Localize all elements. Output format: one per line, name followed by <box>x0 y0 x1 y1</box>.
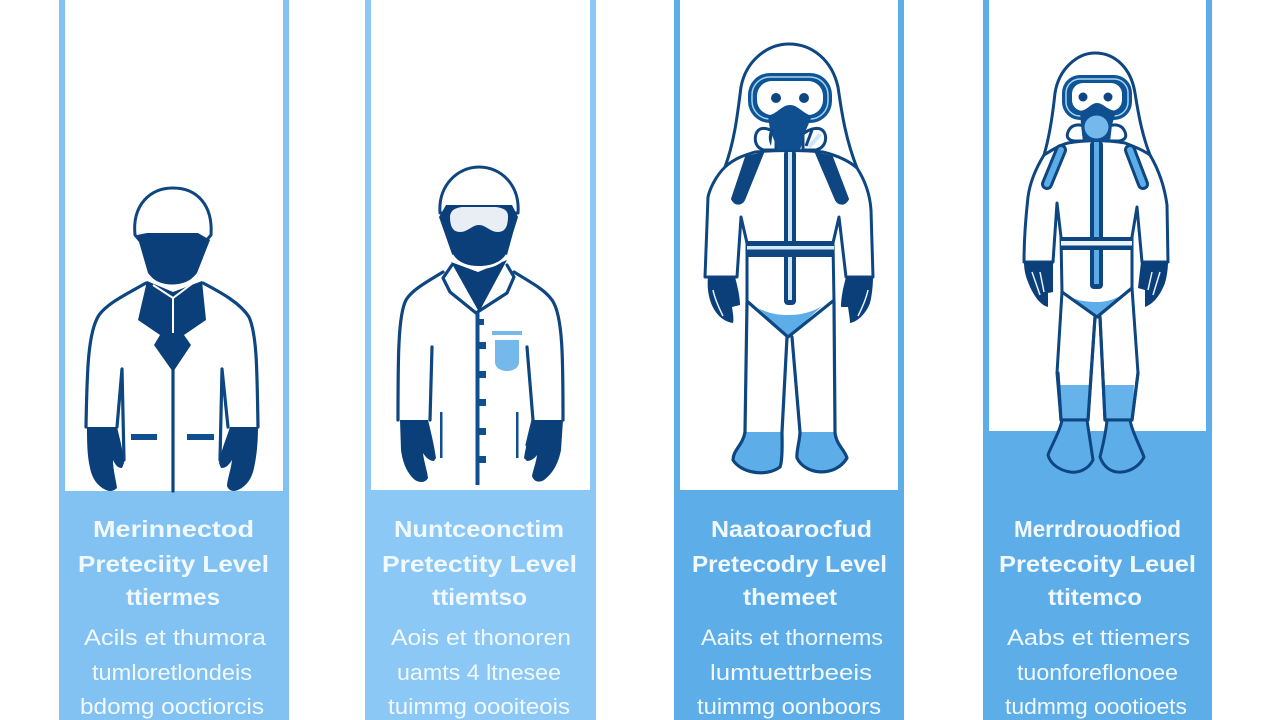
icon: goggles <box>1062 75 1132 120</box>
icon: boots <box>733 432 847 473</box>
text: level 4 caption: tudmmg oootioets <box>1005 694 1187 719</box>
text: level 1 caption: Acils et thumora <box>84 625 267 650</box>
text: level 3 caption: themeet <box>743 584 837 610</box>
text: level 1 caption: tumloretlondeis <box>92 660 252 685</box>
text: level 1 caption: ttiermes <box>126 584 220 610</box>
icon: full suit with dark respirator <box>705 44 873 473</box>
text: level 3 caption: tuimmg oonboors <box>697 694 881 719</box>
text: level 4 caption: Aabs et ttiemers <box>1007 625 1190 650</box>
icon: chest pocket <box>492 331 522 371</box>
panel: level 1 <box>59 0 289 720</box>
text: level 2 caption: ttiemtso <box>432 584 527 610</box>
text: level 3 caption <box>692 516 887 719</box>
text: level 1 caption <box>78 516 269 719</box>
text: level 2 caption: Pretectity Level <box>382 551 577 577</box>
icon: belt <box>1061 237 1132 250</box>
text: level 3 caption: Aaits et thornems <box>701 625 883 650</box>
icon: zipper <box>784 150 796 305</box>
text: level 3 caption: Naatoarocfud <box>711 516 872 542</box>
panel: level 4 <box>983 0 1212 720</box>
text: level 4 caption <box>999 516 1196 719</box>
text: level 2 caption: uamts 4 ltnesee <box>397 660 561 685</box>
text: level 4 caption: Pretecoity Leuel <box>999 551 1196 577</box>
text: level 2 caption <box>382 516 577 719</box>
icon: shoulder straps <box>732 153 848 204</box>
icon: respirator <box>755 105 826 150</box>
text: level 4 caption: ttitemco <box>1048 584 1142 610</box>
icon: coat with goggles and mask <box>398 167 563 485</box>
panel: level 3 <box>674 0 904 720</box>
text: level 2 caption: Aois et thonoren <box>391 625 571 650</box>
icon: blue respirator <box>1067 103 1126 142</box>
icon: goggles <box>748 73 832 123</box>
icon: zipper <box>1090 141 1103 289</box>
icon: shoulder straps <box>1047 150 1143 184</box>
text: level 4 caption: tuonforeflonoee <box>1017 660 1178 685</box>
text: level 2 caption: tuimmg oooiteois <box>388 694 570 719</box>
text: level 3 caption: Pretecodry Level <box>692 551 887 577</box>
panel: level 2 <box>365 0 596 720</box>
icon: blue shin guards <box>1058 317 1138 420</box>
text: level 1 caption: bdomg ooctiorcis <box>80 694 264 719</box>
text: level 1 caption: Merinnectod <box>93 516 254 542</box>
text: level 4 caption: Merrdrouodfiod <box>1014 516 1181 542</box>
text: level 1 caption: Preteciity Level <box>78 551 269 577</box>
text: level 2 caption: Nuntceonctim <box>394 516 564 542</box>
icon: full suit with blue respirator <box>1024 53 1168 472</box>
text: level 3 caption: lumtuettrbeeis <box>710 660 872 685</box>
icon: boots <box>1048 420 1144 472</box>
icon: belt <box>747 241 834 257</box>
icon: lab coat worker <box>86 188 258 491</box>
